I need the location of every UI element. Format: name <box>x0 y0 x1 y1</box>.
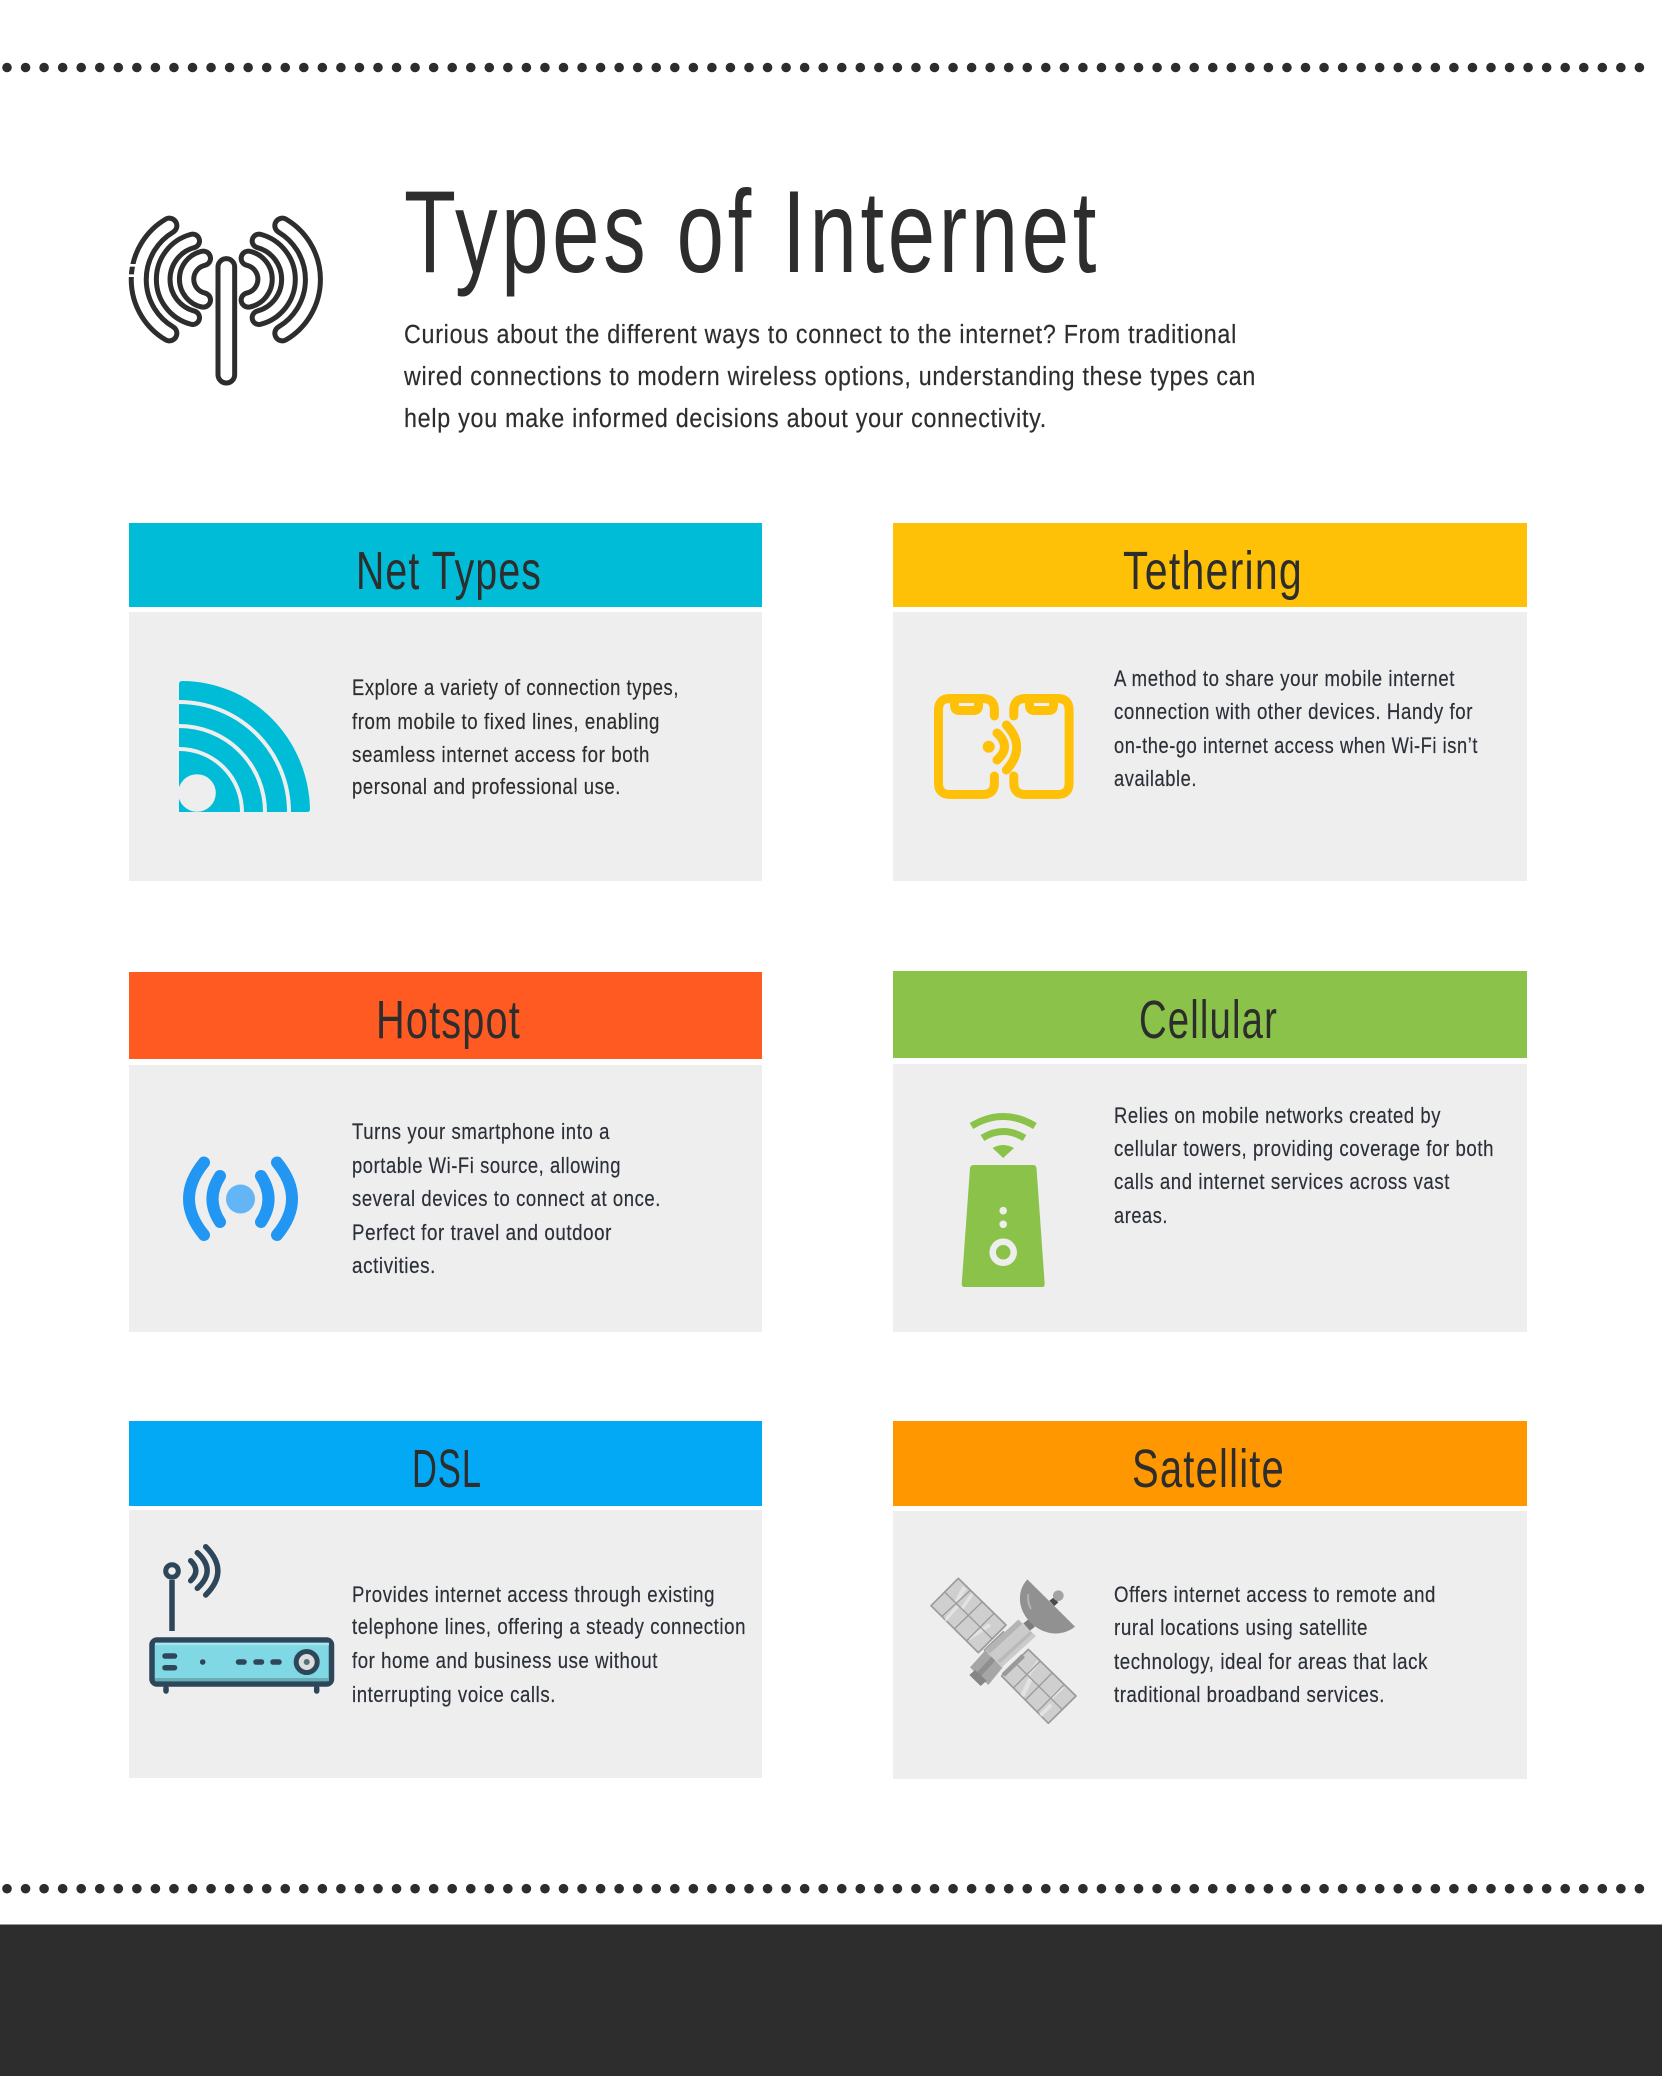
header bar: Hotspot <box>129 972 762 1059</box>
description: Hotspot: several devices to connect at once. <box>352 1186 661 1211</box>
description: Cellular: areas. <box>1114 1203 1168 1228</box>
body background <box>129 612 762 881</box>
description: Satellite: traditional broadband services. <box>1114 1682 1385 1707</box>
icon: cell tower router <box>962 1116 1045 1287</box>
description: Cellular: calls and internet services across vast <box>1114 1169 1450 1194</box>
icon: router with antenna <box>152 1547 332 1691</box>
description: Tethering: on-the-go internet access when Wi-Fi isn’t <box>1114 733 1478 758</box>
bottom dotted divider <box>7 1884 1645 1893</box>
description: Hotspot: Turns your smartphone into a <box>352 1119 610 1144</box>
description: Tethering: connection with other devices. Handy for <box>1114 699 1473 724</box>
panel: Hotspot <box>129 972 762 1332</box>
body background <box>893 1064 1527 1332</box>
body background <box>893 612 1527 881</box>
description: Hotspot: portable Wi-Fi source, allowing <box>352 1153 621 1178</box>
icon: signal quarter arcs <box>178 681 310 812</box>
title: Types of Internet <box>404 166 1100 297</box>
description: Tethering: available. <box>1114 766 1197 791</box>
description: DSL: Provides internet access through existing <box>352 1582 715 1607</box>
icon: satellite <box>931 1578 1076 1723</box>
description: DSL <box>352 1582 746 1707</box>
heading: Net Types: Net Types <box>356 541 542 601</box>
intro paragraph: help you make informed decisions about your connectivity. <box>404 405 1047 433</box>
icon: antenna broadcast <box>128 226 313 383</box>
description: Hotspot: activities. <box>352 1253 436 1278</box>
panel: Satellite <box>893 1421 1527 1779</box>
description: Net Types: from mobile to fixed lines, enabling <box>352 709 660 734</box>
intro paragraph: Curious about the different ways to connect to the internet? From traditional <box>404 321 1237 349</box>
icon: broadcast waves <box>189 1162 292 1235</box>
panel: Net Types <box>129 523 762 881</box>
description: Net Types <box>352 675 679 799</box>
description: DSL: telephone lines, offering a steady connection <box>352 1614 746 1639</box>
description: Satellite: technology, ideal for areas that lack <box>1114 1649 1428 1674</box>
body background <box>129 1510 762 1778</box>
header bar: Net Types <box>129 523 762 607</box>
description: Satellite: rural locations using satellite <box>1114 1615 1368 1640</box>
description: Cellular <box>1114 1103 1494 1228</box>
heading: DSL: DSL <box>412 1439 482 1499</box>
body background <box>129 1065 762 1332</box>
header bar: Satellite <box>893 1421 1527 1506</box>
body background <box>893 1511 1527 1779</box>
heading: Tethering: Tethering <box>1123 541 1303 601</box>
description: Hotspot <box>352 1119 661 1278</box>
description: Net Types: personal and professional use. <box>352 774 621 799</box>
panel: DSL <box>129 1421 762 1778</box>
panel: Cellular <box>893 971 1527 1332</box>
description: Tethering: A method to share your mobile internet <box>1114 666 1455 691</box>
icon: phones sharing signal <box>938 698 1069 794</box>
top dotted divider <box>7 63 1645 72</box>
description: Satellite <box>1114 1582 1436 1707</box>
description: DSL: interrupting voice calls. <box>352 1682 556 1707</box>
description: Net Types: seamless internet access for both <box>352 742 650 767</box>
description: Cellular: Relies on mobile networks created by <box>1114 1103 1441 1128</box>
header text block <box>403 166 1256 433</box>
header bar: Tethering <box>893 523 1527 607</box>
footer band <box>0 1924 1662 2076</box>
description: Hotspot: Perfect for travel and outdoor <box>352 1220 612 1245</box>
header bar: DSL <box>129 1421 762 1506</box>
panel: Tethering <box>893 523 1527 881</box>
heading: Hotspot: Hotspot <box>376 990 521 1050</box>
heading: Cellular: Cellular <box>1139 990 1278 1050</box>
intro paragraph <box>403 321 1256 433</box>
intro paragraph: wired connections to modern wireless options, understanding these types can <box>403 363 1256 391</box>
description: Cellular: cellular towers, providing coverage for both <box>1114 1136 1494 1161</box>
header bar: Cellular <box>893 971 1527 1058</box>
description: Tethering <box>1114 666 1478 791</box>
description: DSL: for home and business use without <box>352 1648 658 1673</box>
description: Satellite: Offers internet access to remote and <box>1114 1582 1436 1607</box>
heading: Satellite: Satellite <box>1132 1439 1285 1499</box>
description: Net Types: Explore a variety of connection types, <box>352 675 679 700</box>
